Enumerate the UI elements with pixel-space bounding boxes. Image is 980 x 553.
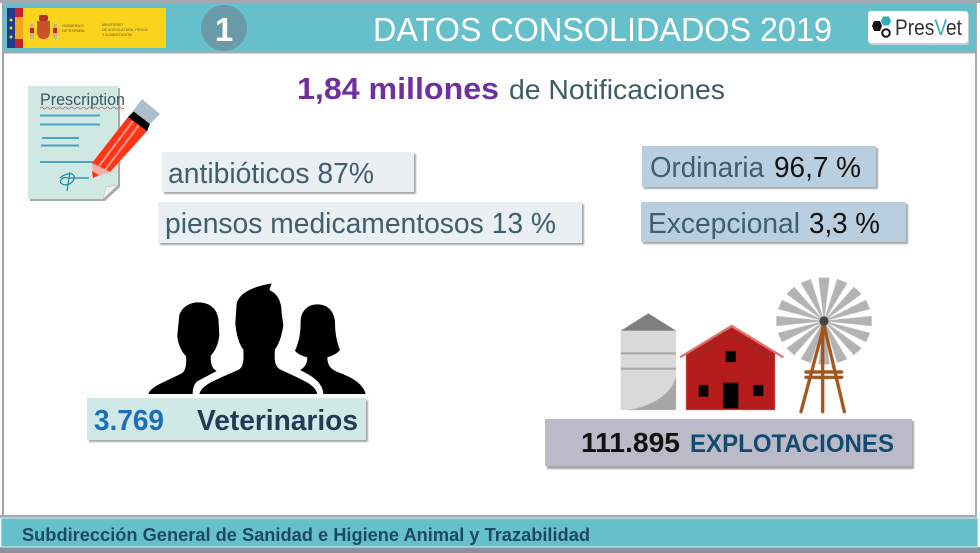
icon: farm with silo, barn and windmill [621, 278, 872, 412]
box: ordinaria: Ordinaria [650, 152, 765, 184]
title: DATOS CONSOLIDADOS 2019 [373, 11, 832, 48]
logo: Gobierno de España: MINISTERIO [102, 23, 123, 27]
icon: prescription and pencil: Prescription [40, 90, 125, 109]
logo: Gobierno de España: DE AGRICULTURA, PESCA [102, 28, 148, 32]
box: excepcional: 3,3 % [809, 208, 880, 240]
heading: notifications: 1,84 millones [297, 71, 499, 106]
box: piensos medicamentosos: piensos medicamentosos 13 % [165, 208, 556, 240]
icon: barn [680, 326, 783, 410]
number badge: 1 [215, 11, 233, 48]
box: explotaciones: EXPLOTACIONES [690, 430, 894, 458]
box: antibióticos [162, 152, 416, 194]
box: excepcional: Excepcional [648, 208, 800, 240]
heading: notifications [297, 71, 725, 106]
icon: prescription and pencil [28, 86, 160, 201]
header bar [3, 3, 976, 54]
logo: PresVet: PresVet [895, 15, 962, 40]
box: veterinarios: 3.769 [94, 405, 164, 437]
logo: Gobierno de España: Y ALIMENTACIÓN [102, 32, 132, 37]
logo: Gobierno de España: GOBIERNO [62, 23, 84, 28]
icon: veterinarians silhouettes [148, 283, 366, 394]
footer bar: Subdirección General de Sanidad e Higiene Animal y Trazabilidad [22, 525, 590, 545]
box: veterinarios: Veterinarios [197, 405, 358, 437]
footer bar [0, 515, 978, 547]
box: explotaciones [545, 419, 914, 469]
box: veterinarios [87, 398, 368, 442]
box: ordinaria [642, 146, 878, 189]
logo: Gobierno de España [7, 8, 166, 48]
icon: windmill [776, 278, 872, 412]
box: ordinaria: 96,7 % [774, 152, 861, 184]
box: excepcional [641, 202, 908, 244]
number badge [201, 5, 247, 51]
icon: silo [621, 313, 676, 410]
box: antibióticos: antibióticos 87% [168, 158, 374, 190]
box: explotaciones: 111.895 [581, 427, 680, 458]
heading: notifications: de Notificaciones [509, 74, 725, 105]
logo: Gobierno de España: DE ESPAÑA [62, 28, 85, 33]
logo: PresVet [868, 11, 969, 45]
